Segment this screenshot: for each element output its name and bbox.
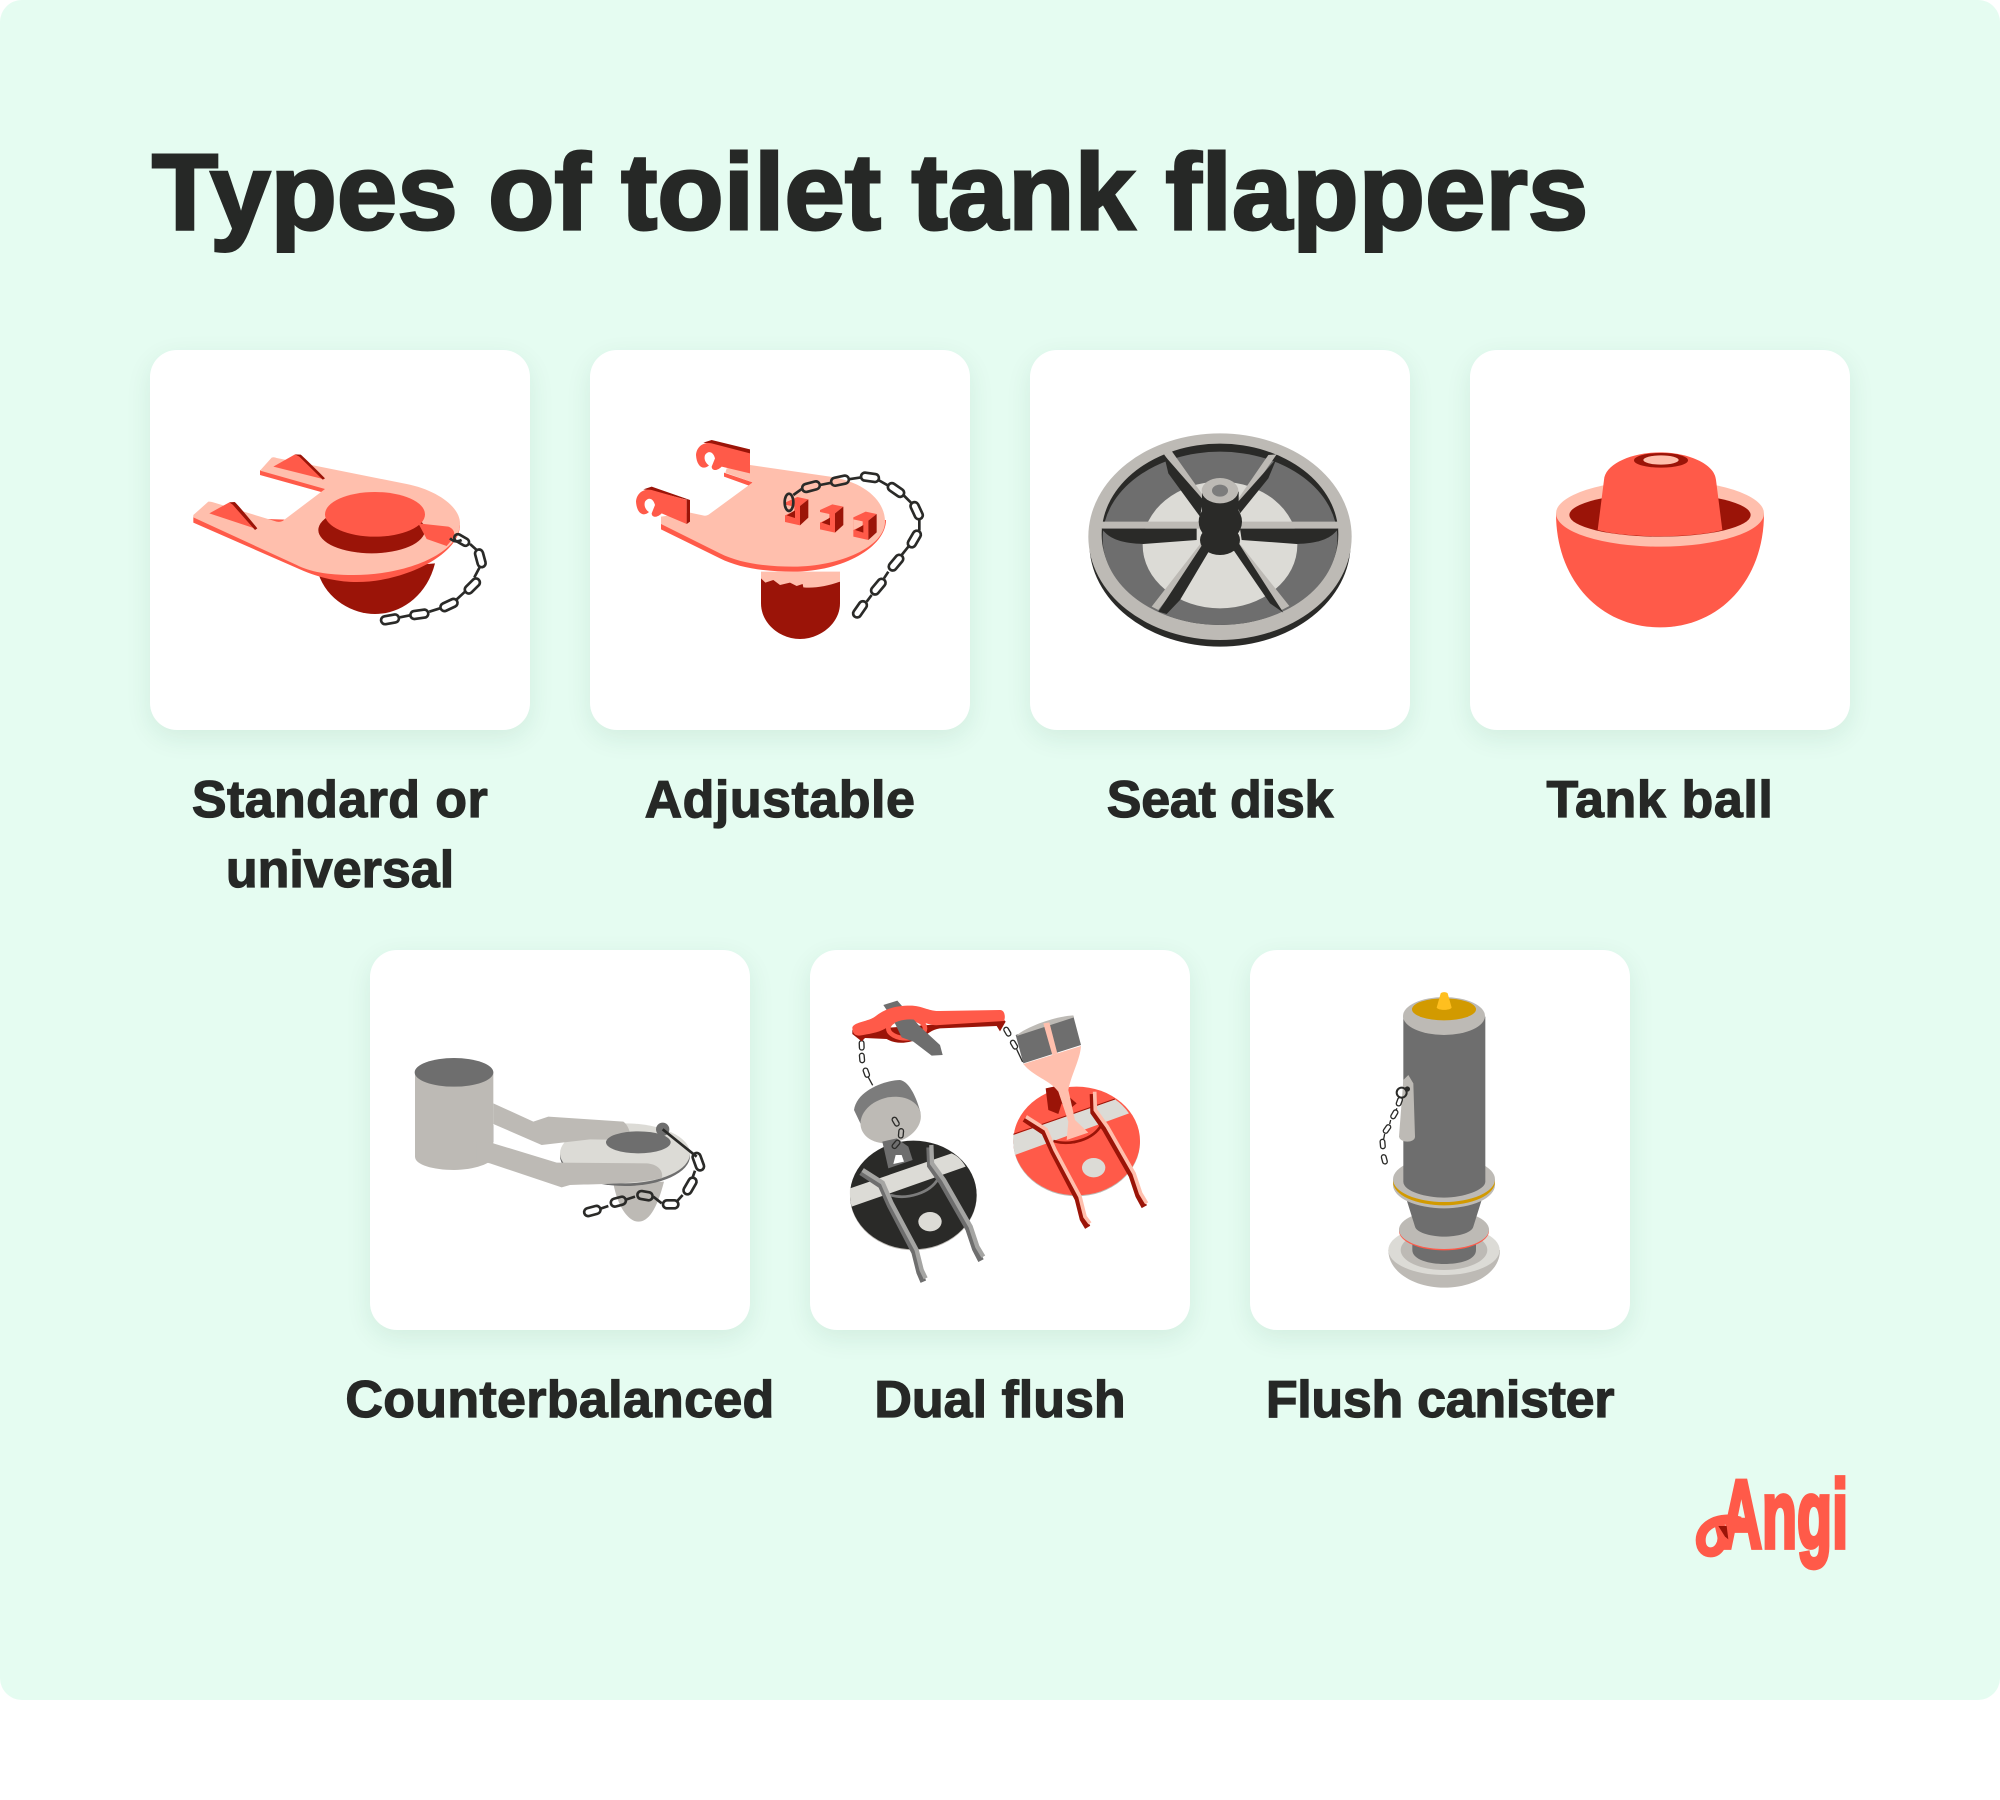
icon: standard flapper — [193, 454, 487, 626]
logo flourish — [1701, 1520, 1740, 1552]
label: Tank ball — [1547, 771, 1773, 829]
panel: Flush canister — [1246, 950, 1634, 1429]
card: flush canister — [1250, 950, 1630, 1330]
label: Standard or — [192, 771, 488, 829]
chain — [793, 477, 919, 602]
card: adjustable flapper — [590, 350, 970, 730]
panel: Standard or universal — [146, 350, 534, 899]
title: Types of toilet tank flappers — [152, 131, 1588, 252]
label: universal — [226, 841, 454, 899]
label: Dual flush — [874, 1371, 1126, 1429]
card: counterbalanced flapper — [370, 950, 750, 1330]
panel: Counterbalanced — [345, 950, 775, 1429]
pink funnel and block — [1023, 1046, 1088, 1140]
panel: Seat disk — [1026, 350, 1414, 829]
lever — [852, 1020, 1006, 1043]
chains — [859, 1026, 1023, 1085]
red flapper — [1013, 1086, 1147, 1227]
logo: Angi — [1696, 1460, 1848, 1570]
lower hook — [636, 487, 690, 524]
panel: Adjustable — [586, 350, 974, 829]
upper hook — [696, 440, 750, 473]
label: Seat disk — [1107, 771, 1333, 829]
card: tank ball — [1470, 350, 1850, 730]
black flapper — [850, 1080, 983, 1282]
label: Flush canister — [1266, 1371, 1614, 1429]
card: seat disk — [1030, 350, 1410, 730]
card: dual flush — [810, 950, 1190, 1330]
card: standard flapper — [150, 350, 530, 730]
icon: flush canister — [1379, 992, 1500, 1288]
icon: adjustable flapper — [636, 440, 924, 639]
label: Adjustable — [645, 771, 915, 829]
label: Counterbalanced — [345, 1371, 775, 1429]
icon: counterbalanced flapper — [414, 1058, 706, 1222]
panel: Dual flush — [806, 950, 1194, 1429]
icon: tank ball — [1556, 452, 1764, 628]
icon: seat disk — [1088, 433, 1352, 647]
icon: dual flush — [850, 1000, 1148, 1283]
blocks — [785, 497, 808, 525]
panel: Tank ball — [1466, 350, 1854, 829]
label — [192, 771, 488, 899]
